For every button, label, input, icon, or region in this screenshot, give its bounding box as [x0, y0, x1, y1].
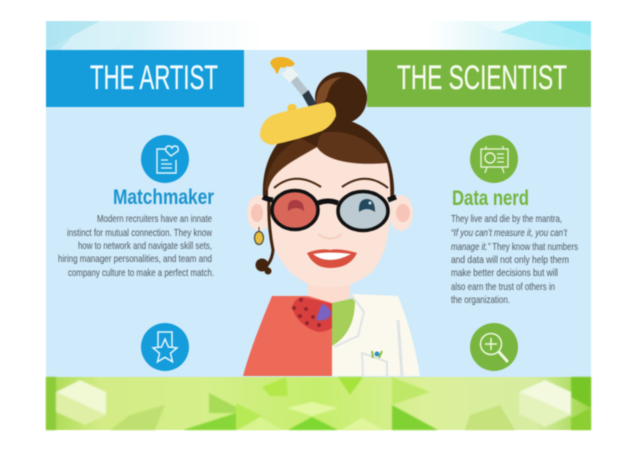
icon: magnifying glass	[470, 323, 518, 371]
scarf	[292, 297, 332, 332]
text: matchmaker description: instinct for mutual connection. They know	[67, 227, 212, 239]
icon: star badge	[141, 323, 189, 371]
text: data nerd description: manage it.” They know that numbers	[451, 241, 578, 253]
header: the artist	[46, 50, 244, 107]
text: matchmaker description	[58, 213, 214, 279]
text: data nerd description: and data will not only help them	[451, 254, 569, 266]
paintbrush	[270, 57, 313, 106]
heading: data nerd: Data nerd	[452, 187, 529, 210]
body: artist half	[243, 296, 332, 376]
text: matchmaker description: how to network and navigate skill sets,	[78, 240, 212, 252]
bottom green geometric band	[46, 377, 591, 430]
text: matchmaker description: Modern recruiters have an innate	[97, 213, 212, 225]
icon: data presentation board	[470, 135, 518, 183]
face	[268, 147, 390, 287]
text: data nerd description: “If you can’t measure it, you can’t	[451, 227, 568, 239]
hair	[263, 118, 394, 200]
hair bun	[315, 72, 367, 124]
panel: background	[46, 50, 591, 377]
ears	[247, 195, 413, 231]
mouth	[307, 249, 357, 268]
text: data nerd description: make better decisions but will	[451, 267, 558, 279]
hair strand and earring	[254, 200, 273, 274]
nose	[318, 234, 342, 238]
text: data nerd description: also earn the trust of others in	[451, 281, 555, 293]
green shirt	[332, 298, 355, 346]
text: data nerd description: They live and die by the mantra,	[451, 213, 562, 225]
icon: matchmaker heart document	[141, 135, 189, 183]
eyebrows	[274, 179, 388, 188]
neck	[308, 270, 350, 303]
text: data nerd description: the organization.	[451, 294, 510, 306]
beret	[260, 102, 336, 145]
text: matchmaker description: company culture to make a perfect match.	[68, 267, 214, 279]
header: the scientist	[367, 50, 591, 107]
text: matchmaker description: hiring manager personalities, and team and	[58, 253, 212, 265]
glasses	[263, 190, 396, 230]
heading: matchmaker: Matchmaker	[113, 186, 214, 209]
header: the artist: THE ARTIST	[90, 59, 218, 97]
body: scientist lab coat	[332, 294, 420, 376]
pens in pocket	[372, 351, 382, 358]
illustration: half artist half scientist woman	[243, 57, 420, 376]
text: data nerd description	[451, 213, 578, 306]
top decorative band	[46, 21, 591, 50]
